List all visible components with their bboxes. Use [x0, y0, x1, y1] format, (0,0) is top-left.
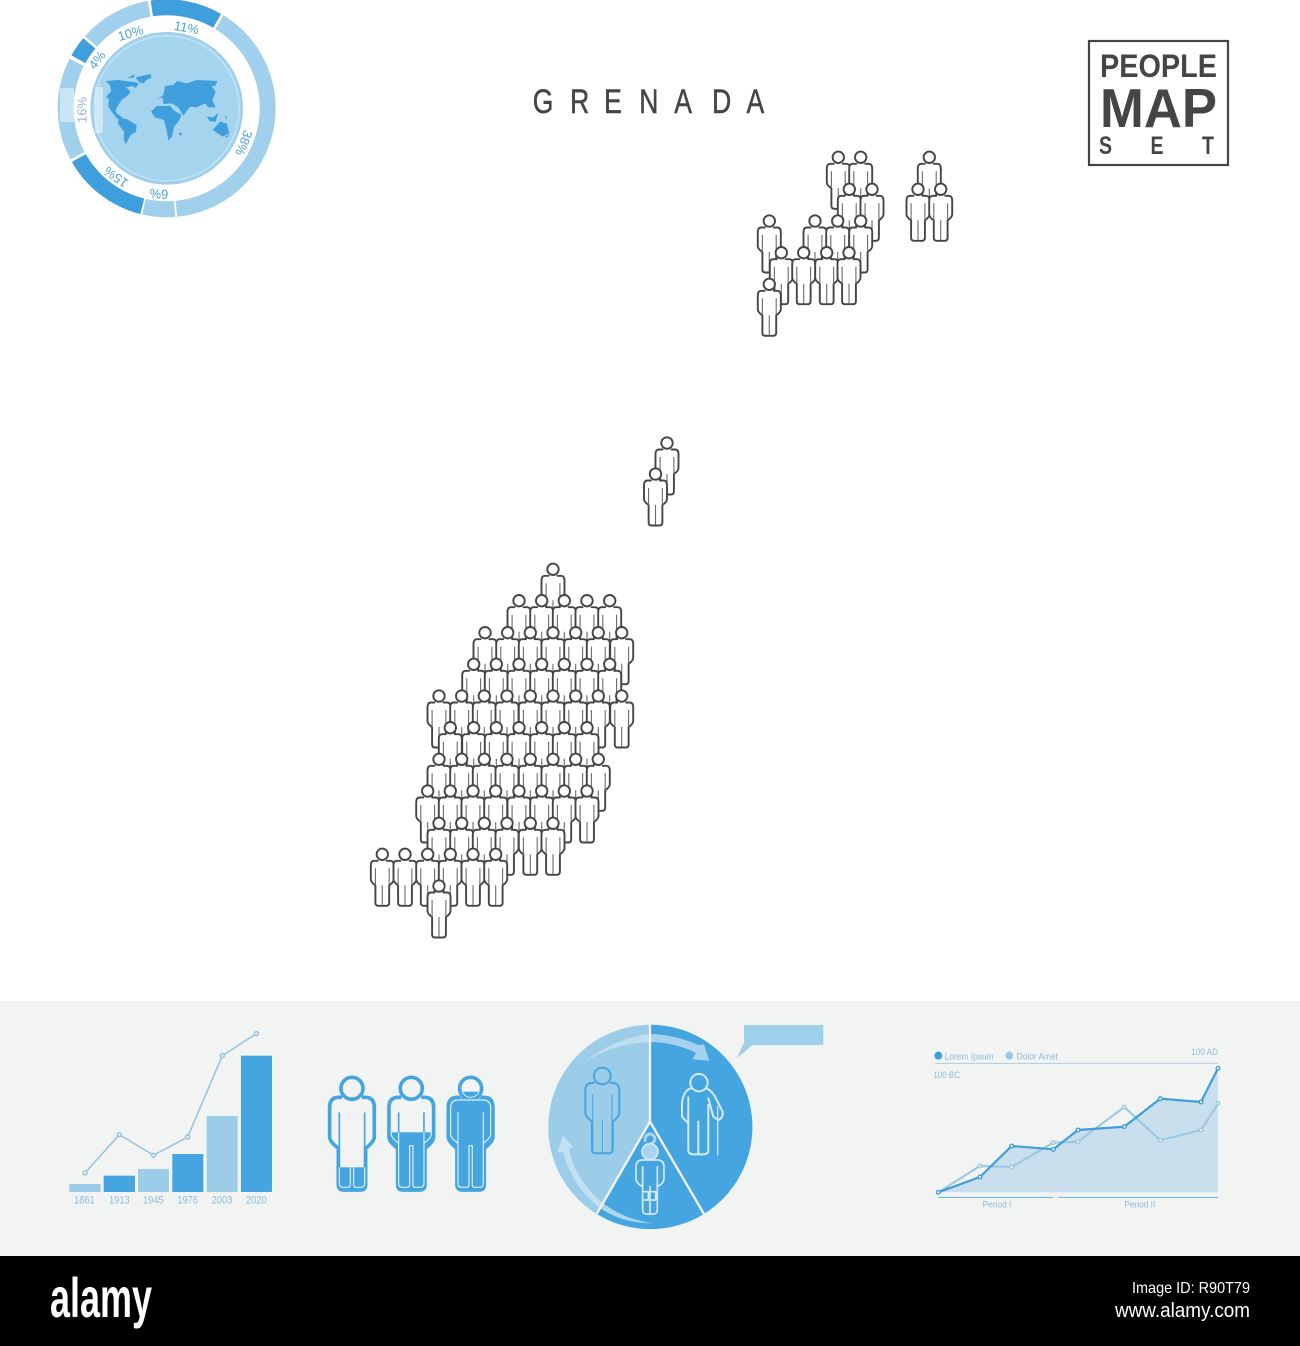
- axis labels: Period I: [983, 1199, 1011, 1209]
- footer logo: alamy: alamy: [50, 1266, 152, 1329]
- sector dividers: [597, 1025, 704, 1214]
- icon: person full fill: [446, 1076, 495, 1192]
- legend: [934, 1051, 1058, 1061]
- icon: elderly person: [682, 1074, 723, 1155]
- percentage labels: 4%: [85, 48, 109, 72]
- footer image id: Image ID: R90T79: [1132, 1280, 1250, 1297]
- percentage labels: 11%: [173, 18, 201, 37]
- filled person icons: [328, 1076, 495, 1192]
- percentage labels: 10%: [116, 22, 146, 44]
- badge: People Map Set: SET: [1099, 132, 1214, 160]
- series: Lorem Ipsum: [936, 1066, 1220, 1194]
- legend: Dolor Amet: [1017, 1051, 1058, 1061]
- icon: person low fill: [328, 1076, 376, 1192]
- axis labels: 100 AD: [1191, 1047, 1218, 1057]
- footer url: www.alamy.com: [1114, 1300, 1250, 1322]
- year labels: 1861: [74, 1195, 95, 1207]
- axis labels: [933, 1047, 1218, 1209]
- arc arrow: bottom left: [557, 1136, 653, 1223]
- donut ring segments: [66, 7, 268, 209]
- world donut chart: [60, 7, 268, 209]
- bars: [69, 1056, 272, 1192]
- axis lines: [935, 1063, 1218, 1197]
- speech bubble: [737, 1025, 823, 1058]
- bar and line chart: [69, 1032, 272, 1207]
- percentage labels: 16%: [75, 97, 90, 123]
- pie sectors: [548, 1025, 752, 1229]
- area fill: [938, 1068, 1218, 1192]
- icon: person mid fill: [387, 1076, 436, 1192]
- percentage labels: 38%: [232, 128, 256, 158]
- legend: Lorem Ipsum: [945, 1051, 994, 1061]
- arc arrow: top: [583, 1034, 709, 1063]
- badge: People Map Set: MAP: [1100, 77, 1217, 139]
- series: Dolor Amet: [938, 1102, 1220, 1192]
- percentage labels: [75, 18, 256, 202]
- globe disc: [91, 33, 242, 184]
- trend line: [83, 1032, 258, 1175]
- axis labels: 100 BC: [933, 1070, 960, 1080]
- icon: child: [636, 1134, 664, 1214]
- line chart: [933, 1047, 1220, 1209]
- year labels: 2020: [246, 1195, 267, 1207]
- year labels: 1945: [143, 1195, 164, 1207]
- percentage labels: 15%: [101, 163, 131, 191]
- badge: People Map Set: PEOPLE: [1100, 48, 1217, 84]
- footer bar: [0, 1256, 1300, 1346]
- percentage labels: 6%: [149, 186, 169, 202]
- year labels: 1913: [109, 1195, 130, 1207]
- year labels: 1976: [177, 1195, 198, 1207]
- people map: main island: [371, 564, 633, 938]
- watermark glare: [60, 87, 103, 133]
- age pie chart: [548, 1025, 823, 1229]
- year labels: 2003: [212, 1195, 232, 1207]
- title: Grenada: GRENADA: [533, 83, 765, 121]
- people map: northern islands: [758, 152, 952, 336]
- year labels: [74, 1195, 267, 1207]
- badge: People Map Set: [1089, 41, 1228, 165]
- world map: [106, 74, 230, 144]
- infographic band: [0, 1001, 1300, 1256]
- icon: adult: [585, 1068, 619, 1153]
- people map: middle island: [644, 437, 678, 526]
- axis labels: Period II: [1124, 1199, 1155, 1209]
